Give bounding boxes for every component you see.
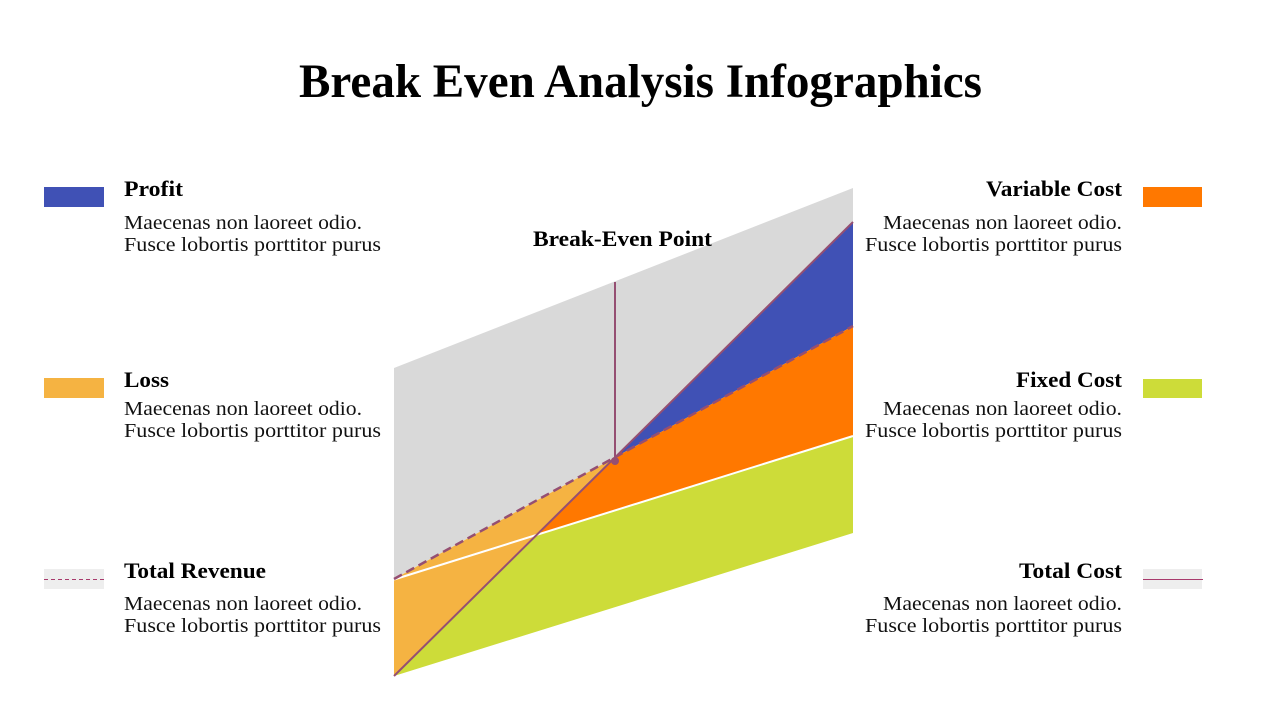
chart: break-even diagram <box>394 188 853 676</box>
text: total cost description: Maecenas non laoreet odio. <box>883 593 1122 615</box>
heading: total revenue: Total Revenue <box>124 558 266 583</box>
swatch: profit <box>44 187 104 207</box>
text: loss description <box>124 398 381 442</box>
text: fixed cost description: Fusce lobortis porttitor purus <box>865 420 1122 442</box>
title: Break Even Analysis Infographics <box>299 55 982 108</box>
text: fixed cost description <box>865 398 1122 442</box>
text: loss description: Maecenas non laoreet odio. <box>124 398 362 420</box>
text: variable cost description: Fusce lobortis porttitor purus <box>865 234 1122 256</box>
text: profit description <box>124 212 381 256</box>
line: break-even marker <box>614 282 616 461</box>
swatch: fixed cost <box>1143 379 1202 398</box>
text: loss description: Fusce lobortis porttitor purus <box>124 420 381 442</box>
area: background <box>394 188 853 579</box>
panel: fixed cost legend <box>865 367 1202 442</box>
text: profit description: Maecenas non laoreet odio. <box>124 212 362 234</box>
text: profit description: Fusce lobortis porttitor purus <box>124 234 381 256</box>
text: total revenue description <box>124 593 381 637</box>
heading: variable cost: Variable Cost <box>986 176 1123 201</box>
line: fixed cost top <box>394 436 853 580</box>
marker: break-even point <box>611 457 619 465</box>
text: total revenue description: Maecenas non laoreet odio. <box>124 593 362 615</box>
heading: fixed cost: Fixed Cost <box>1016 367 1123 392</box>
swatch: loss <box>44 378 104 398</box>
line: total revenue <box>394 326 853 579</box>
heading: profit: Profit <box>124 176 184 201</box>
swatch: variable cost <box>1143 187 1202 207</box>
area: loss <box>394 457 615 676</box>
line: total cost <box>394 222 853 676</box>
area: profit <box>615 222 853 457</box>
heading: total cost: Total Cost <box>1019 558 1123 583</box>
area: variable cost <box>536 326 853 535</box>
panel: total cost legend <box>865 558 1203 637</box>
area: fixed cost <box>394 436 853 676</box>
swatch: total cost solid line <box>1143 569 1203 589</box>
text: fixed cost description: Maecenas non laoreet odio. <box>883 398 1122 420</box>
text: variable cost description: Maecenas non laoreet odio. <box>883 212 1122 234</box>
panel: loss legend <box>44 367 381 442</box>
text: total cost description <box>865 593 1122 637</box>
panel: variable cost legend <box>865 176 1202 256</box>
label: break-even point: Break-Even Point <box>533 226 713 251</box>
panel: profit legend <box>44 176 381 256</box>
heading: loss: Loss <box>124 367 169 392</box>
panel: total revenue legend <box>44 558 381 637</box>
text: variable cost description <box>865 212 1122 256</box>
text: total cost description: Fusce lobortis porttitor purus <box>865 615 1122 637</box>
text: total revenue description: Fusce lobortis porttitor purus <box>124 615 381 637</box>
swatch: total revenue dashed line <box>44 569 104 589</box>
